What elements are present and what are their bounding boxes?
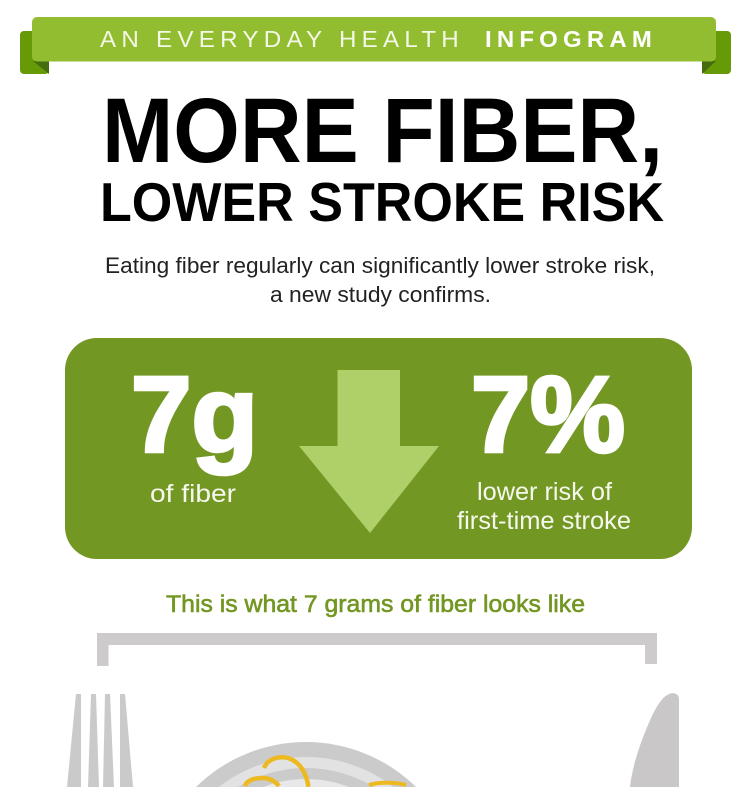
- bracket: [97, 633, 657, 666]
- banner text: [100, 26, 657, 52]
- heading: 7 grams: This is what 7 grams of fiber looks like: [166, 591, 585, 618]
- title line 1: MORE FIBER,: [102, 80, 663, 182]
- noodles: [245, 757, 406, 787]
- plate with noodles: [196, 742, 416, 787]
- icon: fork: [67, 694, 133, 787]
- stat: 7%: 7%: [471, 354, 625, 474]
- intro text: [105, 253, 655, 307]
- label: of fiber: of fiber: [150, 480, 236, 508]
- label: lower risk: [457, 478, 631, 535]
- stat: 7g: 7g: [131, 354, 258, 474]
- arrow: down: [299, 370, 439, 533]
- plate: [196, 742, 416, 787]
- ribbon tail right: [702, 31, 731, 74]
- label: lower risk: lower risk of: [477, 478, 612, 506]
- title: [100, 80, 664, 233]
- intro text: a new study confirms.: [270, 282, 491, 307]
- banner ribbon: [20, 17, 731, 74]
- title line 2: LOWER STROKE RISK: [100, 171, 664, 233]
- banner text: AN EVERYDAY HEALTH: [100, 26, 464, 52]
- intro text: Eating fiber regularly can significantly lower stroke risk,: [105, 253, 655, 278]
- icon: knife: [630, 693, 679, 787]
- banner bar: [32, 17, 716, 62]
- panel: fiber statistic: [65, 338, 692, 559]
- label: lower risk: first-time stroke: [457, 507, 631, 535]
- banner text: INFOGRAM: [485, 26, 657, 52]
- panel background: [65, 338, 692, 559]
- ribbon tail left: [20, 31, 49, 74]
